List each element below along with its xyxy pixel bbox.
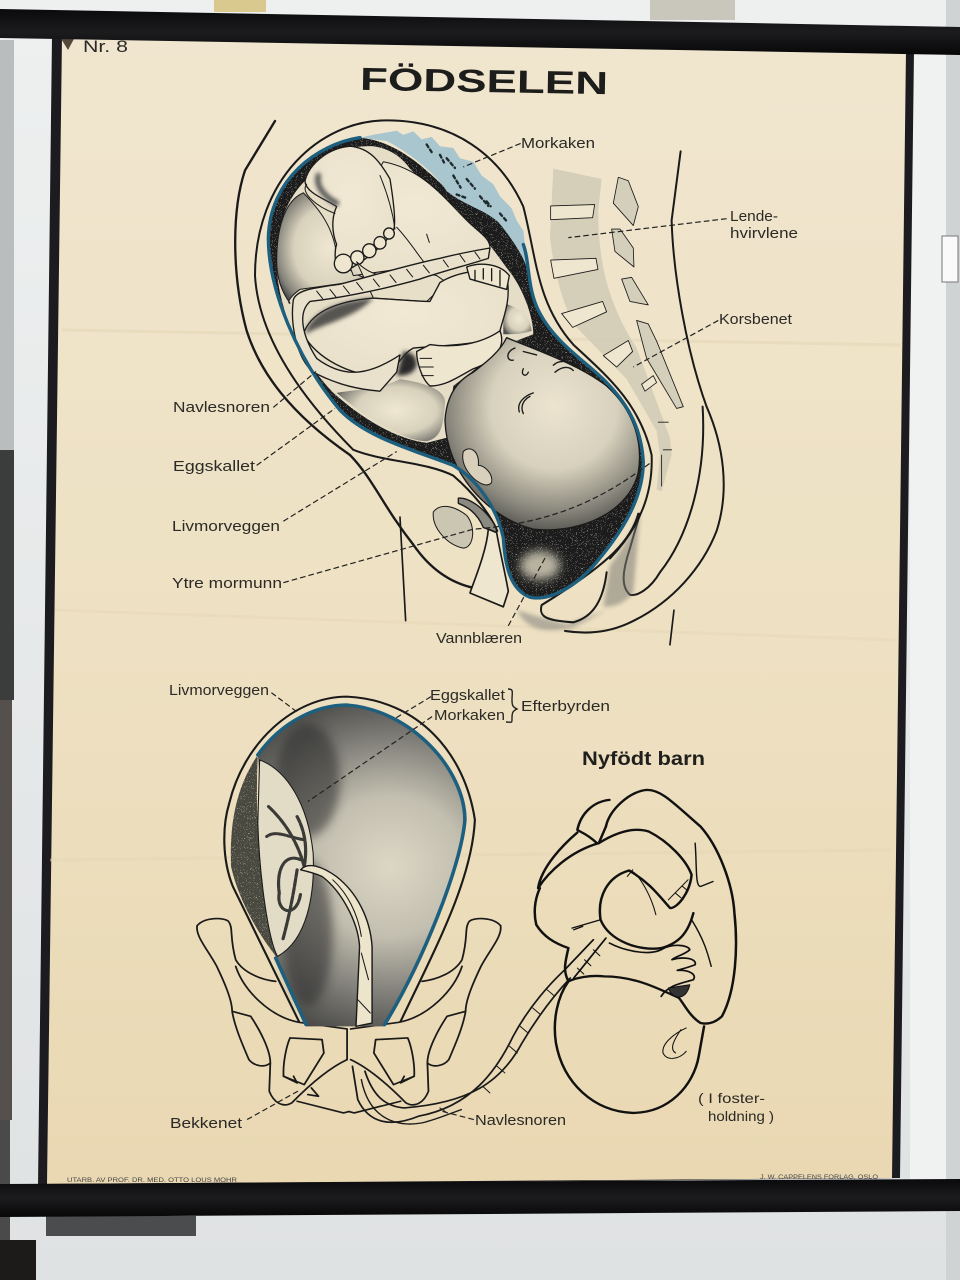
label Livmorveggen: Livmorveggen: [172, 518, 280, 535]
uterine wall: [255, 120, 652, 558]
newborn ear: [663, 1028, 686, 1058]
diagram: fetus in uterus during birth: [235, 120, 727, 645]
amniotic fluid: [268, 138, 643, 598]
uterine wall outline: [224, 697, 475, 1021]
labels: top diagram: hvirvlene: [730, 225, 798, 242]
face features: [508, 348, 577, 414]
label Bekkenet: Bekkenet: [170, 1115, 243, 1132]
fingers on the shin: [467, 264, 509, 289]
spine: [550, 169, 683, 491]
fetal head: [445, 338, 640, 530]
top roller bar: [0, 9, 960, 55]
brace: [506, 689, 517, 722]
label Navlesnoren: Navlesnoren: [173, 399, 270, 416]
diagram: uterus with placenta over pelvis: [197, 693, 570, 1124]
label Morkaken: Morkaken: [521, 135, 595, 152]
back foot: [577, 800, 609, 843]
label Navlesnoren lower: Navlesnoren: [475, 1112, 566, 1129]
label Lendehvirvlene: Lende-: [730, 208, 778, 225]
forearm: [535, 888, 568, 981]
diagram: newborn baby: [535, 790, 736, 1113]
hand: [417, 331, 502, 386]
imprint credits: UTARB. AV PROF. DR. MED. OTTO LOUS MOHR: [67, 1177, 237, 1184]
spinous processes: [612, 177, 683, 408]
forewaters: [520, 551, 560, 580]
thigh: [277, 193, 373, 303]
fetal ear: [463, 449, 492, 485]
head: [555, 981, 704, 1113]
outer belly contour: [235, 121, 473, 588]
placenta and decidua: [231, 755, 277, 958]
fetal body mass: [277, 146, 533, 443]
umbilical cord to newborn: [352, 970, 570, 1122]
label Eggskallet lower: Eggskallet: [430, 687, 506, 704]
labels: top diagram: [172, 135, 798, 647]
newborn cord: [565, 938, 606, 978]
fetal lower body: [337, 379, 445, 441]
bottom roller bar: [0, 1179, 960, 1217]
placenta: [360, 131, 528, 272]
pelvis right half: [349, 919, 501, 1113]
hand: [609, 943, 695, 996]
title: FÖDSELEN: [360, 61, 608, 101]
bladder and pubic bone: [433, 506, 473, 548]
blue membrane: [258, 705, 465, 1025]
pelvis left half: [197, 919, 349, 1113]
label Efterbyrden: Efterbyrden: [521, 698, 610, 715]
umbilical cord: [292, 248, 490, 391]
label Morkaken lower: Morkaken: [434, 707, 505, 724]
label Vannblaeren: Vannblæren: [436, 630, 522, 647]
umbilical cord: [301, 866, 372, 1026]
label fosterholdning: ( I foster-: [698, 1090, 765, 1106]
torso: [340, 162, 490, 276]
body: [568, 790, 736, 1024]
shin and knee: [538, 830, 693, 949]
poster number: Nr. 8: [83, 38, 128, 56]
labels: lower diagram: [169, 682, 774, 1132]
imprint credits: J. W. CAPPELENS FORLAG, OSLO: [760, 1174, 878, 1181]
uterine cavity: [258, 705, 465, 1026]
imprint credits: [67, 1174, 878, 1184]
leader lines: [257, 143, 727, 626]
label Ytre mormunn: Ytre mormunn: [172, 575, 282, 592]
label Livmorveggen lower: Livmorveggen: [169, 682, 269, 699]
blue membrane: [268, 138, 643, 598]
back contour: [565, 151, 724, 633]
fetal shoulder: [503, 303, 532, 334]
label Korsbenet: Korsbenet: [719, 311, 793, 328]
rectum and pelvic floor: [624, 407, 703, 595]
thigh and arm: [303, 270, 508, 376]
labels: lower diagram: holdning ): [708, 1108, 774, 1124]
leader lines: [247, 693, 474, 1120]
heading Nyfodt barn: Nyfödt barn: [582, 749, 705, 770]
label Eggskallet: Eggskallet: [173, 458, 256, 475]
leg and foot: [305, 146, 395, 272]
